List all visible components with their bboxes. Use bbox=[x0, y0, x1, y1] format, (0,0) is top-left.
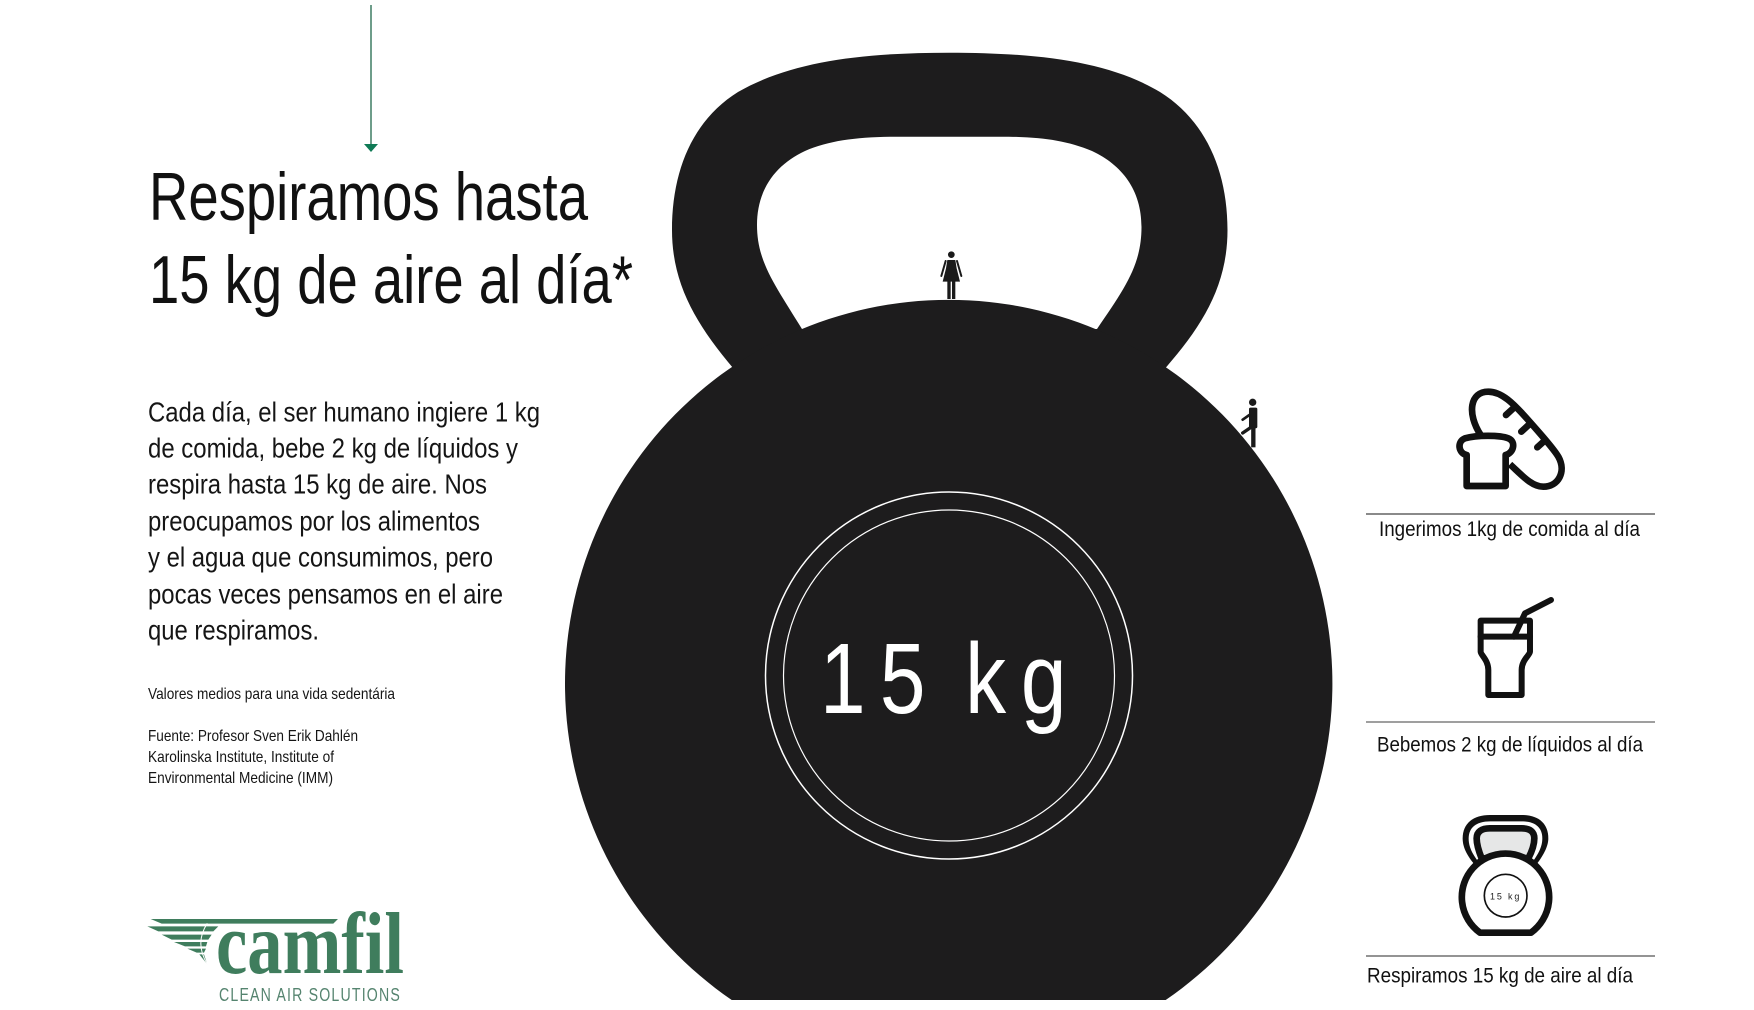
divider bbox=[1366, 721, 1655, 723]
icon: small kettlebell bbox=[1462, 815, 1549, 933]
label: liquids: Bebemos 2 kg de líquidos al día bbox=[1377, 734, 1643, 756]
title: Respiramos hasta bbox=[149, 159, 588, 235]
body text bbox=[148, 397, 540, 646]
item: liquids bbox=[1366, 600, 1655, 756]
item: food bbox=[1366, 392, 1655, 541]
source bbox=[148, 728, 358, 787]
source: Fuente: Profesor Sven Erik Dahlén bbox=[148, 728, 358, 745]
icon: cup with straw bbox=[1481, 600, 1551, 695]
body text: Cada día, el ser humano ingiere 1 kg bbox=[148, 397, 540, 428]
icon: bread bbox=[1460, 392, 1562, 487]
source: Karolinska Institute, Institute of bbox=[148, 749, 334, 766]
logo wing bbox=[147, 919, 338, 964]
label: food: Ingerimos 1kg de comida al día bbox=[1379, 518, 1640, 541]
divider bbox=[1366, 955, 1655, 957]
body text: que respiramos. bbox=[148, 614, 319, 646]
camfil logo bbox=[147, 896, 404, 1005]
body text: preocupamos por los alimentos bbox=[148, 506, 480, 536]
title bbox=[149, 159, 633, 318]
label: air: Respiramos 15 kg de aire al día bbox=[1367, 964, 1633, 988]
kettlebell body bbox=[565, 300, 1332, 1000]
logo tagline: CLEAN AIR SOLUTIONS bbox=[219, 985, 401, 1005]
note: sedentary values: Valores medios para una vida sedentária bbox=[148, 686, 395, 703]
item: air bbox=[1366, 815, 1655, 988]
body text: respira hasta 15 kg de aire. Nos bbox=[148, 469, 487, 500]
logo wordmark: camfil bbox=[216, 896, 404, 993]
source: Environmental Medicine (IMM) bbox=[148, 770, 333, 787]
body text: de comida, bebe 2 kg de líquidos y bbox=[148, 433, 518, 464]
kettlebell bbox=[565, 53, 1332, 1000]
title: 15 kg de aire al día* bbox=[149, 242, 633, 318]
kettlebell handle bbox=[672, 53, 1228, 368]
body text: y el agua que consumimos, pero bbox=[148, 542, 493, 572]
icon: woman bbox=[941, 251, 961, 299]
15 kg label: 15 kg bbox=[820, 623, 1067, 735]
body text: pocas veces pensamos en el aire bbox=[148, 578, 503, 610]
divider bbox=[1366, 513, 1655, 515]
icon: walking man bbox=[1243, 399, 1257, 447]
arrow bbox=[364, 5, 378, 152]
icon: small kettlebell: 15 kg bbox=[1490, 892, 1519, 902]
plate rings bbox=[766, 492, 1132, 859]
